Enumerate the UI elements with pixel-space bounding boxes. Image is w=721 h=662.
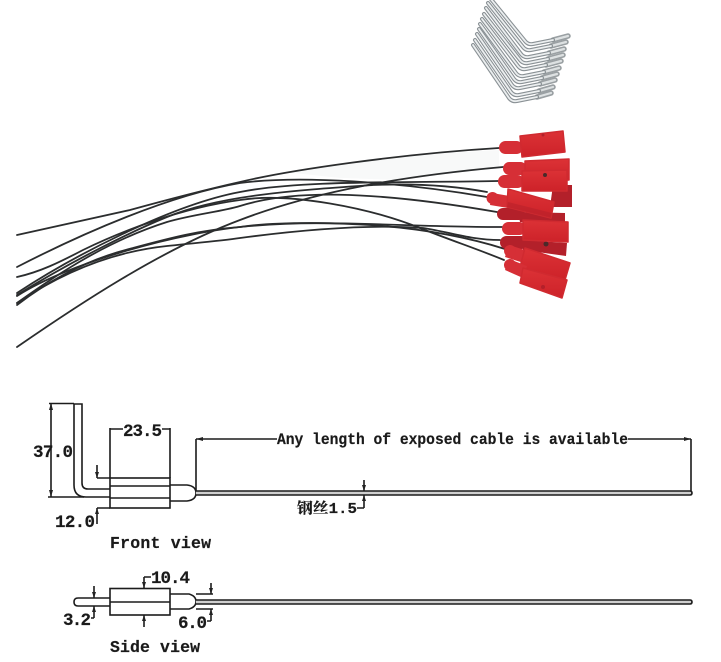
seal: seventh	[502, 220, 568, 242]
dimension: exposed cable length: Any length of exposed cable is available	[277, 431, 628, 449]
dimension 3.2	[63, 586, 96, 631]
seal: top	[499, 131, 565, 157]
cable	[196, 491, 692, 495]
seal: fifth angled	[486, 189, 554, 218]
seal: tenth angled	[504, 259, 567, 298]
seal: rear right	[550, 185, 572, 207]
seal: third with hole	[498, 170, 567, 191]
dimension: wire diameter: 钢丝1.5	[297, 499, 357, 518]
seal: second	[503, 159, 569, 182]
seal: ninth angled	[504, 245, 570, 280]
dimension 12.0: 12.0	[55, 513, 95, 533]
photo: red plastic seal heads	[486, 131, 572, 298]
seal: sixth behind	[497, 208, 565, 222]
dimension 10.4: 10.4	[151, 569, 190, 589]
dimension 6.0	[178, 583, 213, 634]
seal body	[110, 588, 170, 615]
photo: faint reflection behind cables	[285, 150, 499, 180]
label: front view: Front view	[110, 534, 211, 553]
seal: eighth with hole	[500, 236, 567, 256]
dimension 23.5	[110, 422, 170, 478]
dimension: wire diameter	[297, 480, 366, 518]
nose	[170, 594, 196, 609]
pin	[74, 598, 110, 606]
cable	[196, 600, 692, 604]
photo: black steel cables	[17, 148, 505, 347]
dimension 3.2: 3.2	[63, 611, 91, 631]
dimension 37.0: 37.0	[33, 443, 73, 463]
dimension 23.5: 23.5	[123, 422, 162, 442]
diagram: side view	[63, 569, 692, 657]
photo: bundle of bent metal hooks	[473, 0, 568, 101]
nose	[170, 485, 196, 501]
label: side view: Side view	[110, 638, 200, 657]
dimension 12.0	[55, 465, 110, 533]
dimension: exposed cable length	[196, 431, 691, 491]
dimension 37.0	[33, 403, 84, 497]
diagram: front view	[33, 403, 692, 553]
seal body	[110, 478, 170, 508]
dimension 6.0: 6.0	[178, 614, 207, 634]
dimension 10.4	[142, 569, 190, 627]
hook outline	[74, 404, 110, 497]
